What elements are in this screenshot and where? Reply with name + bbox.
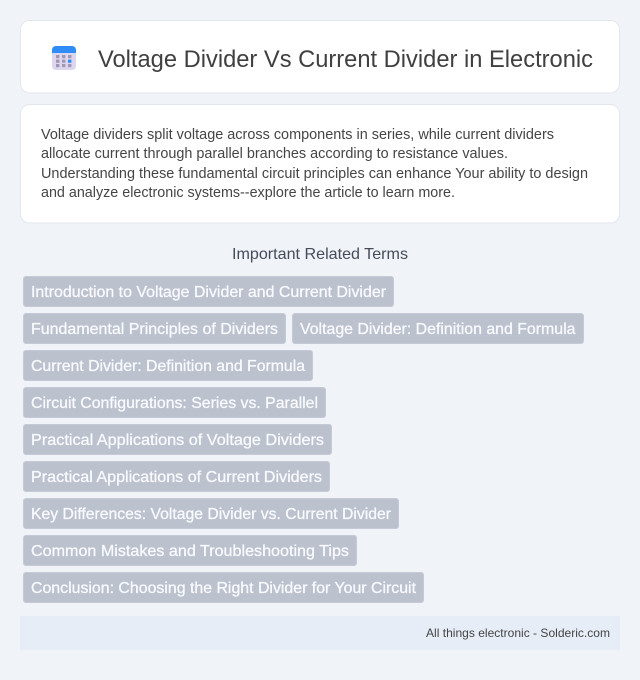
- tag: common mistakes: Common Mistakes and Troubleshooting Tips: [31, 543, 349, 560]
- tag: current divider definition: [24, 350, 312, 380]
- header card: [20, 20, 620, 93]
- tag: key differences: Key Differences: Voltage Divider vs. Current Divider: [31, 506, 392, 523]
- tag: circuit configurations: Circuit Configurations: Series vs. Parallel: [31, 395, 318, 412]
- tag: applications of current dividers: Practical Applications of Current Dividers: [31, 469, 322, 486]
- tag: applications of current dividers: [24, 462, 330, 492]
- tag: fundamental principles: Fundamental Principles of Dividers: [31, 321, 278, 338]
- tag: conclusion: [24, 572, 424, 602]
- tag: circuit configurations: [24, 388, 326, 418]
- description text: Voltage dividers split voltage across components in series, while current dividers: [41, 127, 554, 143]
- related terms tag list: [24, 276, 584, 602]
- description text: and analyze electronic systems--explore the article to learn more.: [41, 185, 455, 201]
- description text: allocate current through parallel branches according to resistance values.: [41, 146, 508, 162]
- tag: applications of voltage dividers: [24, 424, 332, 454]
- heading: important related terms: Important Related Terms: [232, 246, 408, 263]
- description text: Understanding these fundamental circuit principles can enhance Your ability to design: [41, 166, 588, 182]
- tag: common mistakes: [24, 536, 356, 566]
- title: Voltage Divider Vs Current Divider in Electronic: [98, 46, 593, 73]
- tag: current divider definition: Current Divider: Definition and Formula: [31, 358, 305, 375]
- footer bar: [20, 616, 620, 650]
- tag: introduction: [24, 276, 394, 306]
- footer credit: All things electronic - Solderic.com: [426, 626, 610, 640]
- tag: introduction: Introduction to Voltage Divider and Current Divider: [31, 284, 387, 301]
- tag: voltage divider definition: [292, 314, 584, 344]
- tag: applications of voltage dividers: Practical Applications of Voltage Dividers: [31, 432, 324, 449]
- tag: fundamental principles: [24, 314, 286, 344]
- icon: calendar: [52, 46, 76, 70]
- tag: voltage divider definition: Voltage Divider: Definition and Formula: [300, 321, 576, 338]
- tag: key differences: [24, 498, 398, 528]
- tag: conclusion: Conclusion: Choosing the Right Divider for Your Circuit: [31, 580, 417, 597]
- description card: [20, 104, 620, 223]
- description text: [41, 127, 588, 201]
